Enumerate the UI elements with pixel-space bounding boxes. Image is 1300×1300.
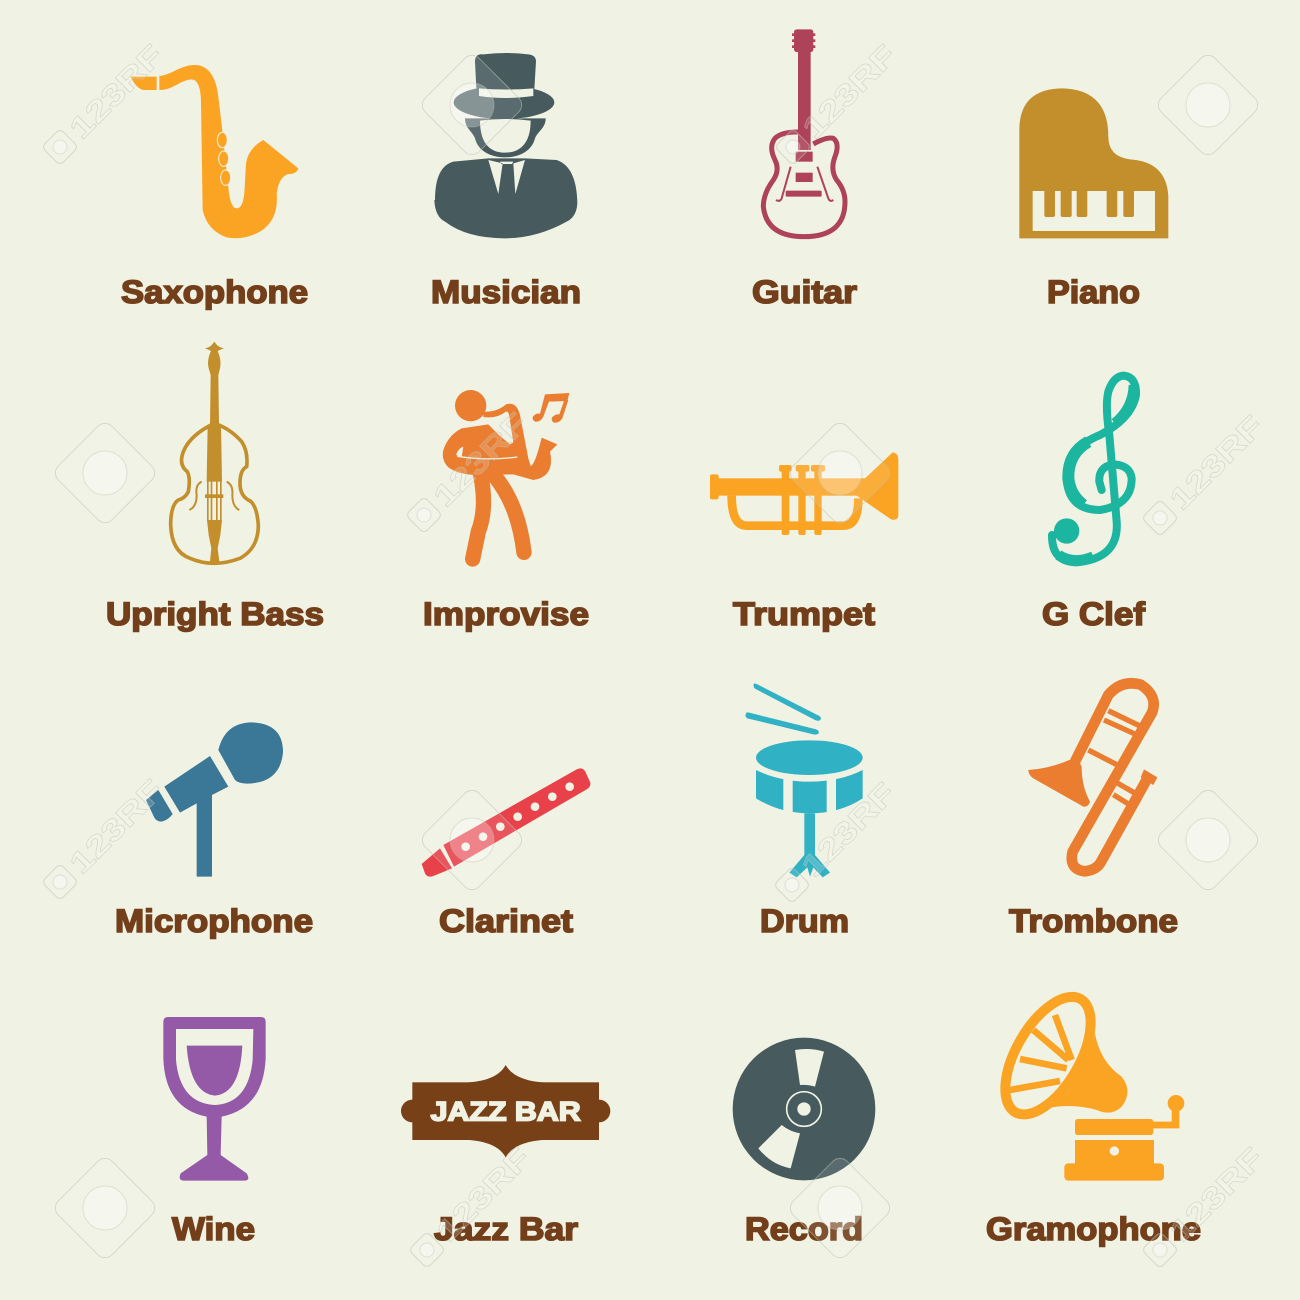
watermark overlay: 123RF	[431, 1142, 537, 1249]
panel: piano	[1019, 88, 1168, 310]
panel: guitar	[752, 29, 857, 310]
panel: jazz bar	[401, 1065, 610, 1247]
icon: trombone	[1028, 683, 1157, 871]
panel: wine	[163, 1017, 266, 1247]
label: Improvise: Improvise	[423, 596, 589, 632]
panel: microphone	[115, 722, 313, 939]
label: G Clef: G Clef	[1042, 596, 1145, 632]
watermark overlay: 123RF	[64, 39, 170, 146]
icon: musician	[434, 53, 577, 238]
watermark overlay: 123RF	[797, 39, 903, 146]
icon: wine glass	[163, 1017, 266, 1181]
label: Record: Record	[745, 1211, 863, 1247]
watermark overlay: 123RF	[796, 777, 902, 884]
label: Gramophone: Gramophone	[986, 1211, 1201, 1247]
icon: saxophone	[131, 65, 298, 238]
watermark overlay: 123RF	[1164, 410, 1270, 517]
icon: upright bass	[171, 342, 258, 564]
panel: gramophone	[986, 983, 1201, 1247]
panel: g clef	[1042, 376, 1145, 632]
icon: clarinet	[422, 768, 590, 877]
panel: improvise	[423, 390, 589, 632]
label: Guitar: Guitar	[752, 274, 857, 310]
label: Drum: Drum	[760, 903, 849, 939]
label: Clarinet: Clarinet	[439, 903, 573, 939]
watermark overlay: 123RF	[64, 774, 170, 881]
icon: piano	[1019, 88, 1168, 238]
panel: upright bass	[106, 342, 324, 632]
watermark overlay: 123RF	[428, 407, 534, 514]
icon: record	[733, 1038, 875, 1180]
icon: jazz bar sign	[401, 1065, 610, 1157]
icon: drum	[745, 683, 863, 877]
label: Piano: Piano	[1047, 274, 1140, 310]
watermark overlay: 123RF	[1164, 1142, 1270, 1249]
icon: guitar	[763, 29, 845, 237]
icon: jazz bar sign: JAZZ BAR	[431, 1096, 581, 1126]
panel: saxophone	[121, 65, 308, 310]
icon: g clef	[1052, 376, 1136, 562]
label: Saxophone: Saxophone	[121, 274, 308, 310]
icon: gramophone	[988, 983, 1184, 1181]
label: Microphone: Microphone	[115, 903, 313, 939]
panel: drum	[745, 683, 863, 939]
icon: improvising saxophonist	[443, 390, 569, 559]
panel: record	[733, 1038, 875, 1247]
label: Trombone: Trombone	[1009, 903, 1178, 939]
panel: trumpet	[710, 452, 898, 632]
label: Wine: Wine	[172, 1211, 255, 1247]
panel: trombone	[1009, 683, 1178, 939]
panel: musician	[431, 53, 581, 310]
label: Upright Bass: Upright Bass	[106, 596, 324, 632]
icon: microphone	[146, 722, 283, 877]
label: Trumpet: Trumpet	[733, 596, 875, 632]
panel: clarinet	[422, 768, 590, 939]
icon: trumpet	[710, 452, 898, 535]
label: Musician: Musician	[431, 274, 581, 310]
label: Jazz Bar: Jazz Bar	[434, 1211, 578, 1247]
